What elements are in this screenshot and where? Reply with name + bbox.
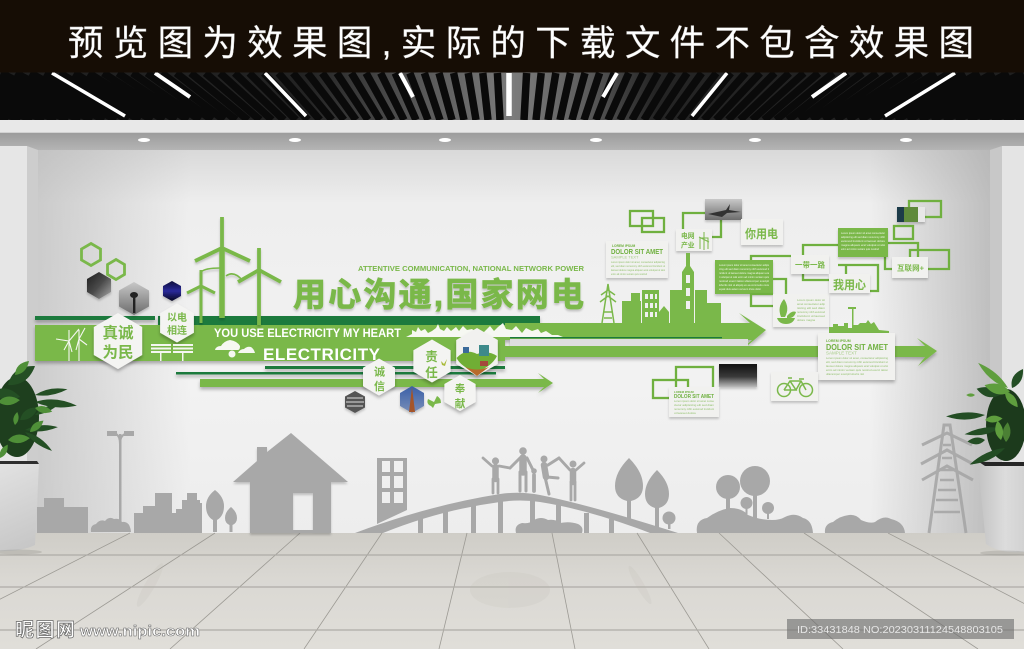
grey silhouette: round trees and hedge xyxy=(697,466,813,533)
card: 我用心 xyxy=(829,274,870,293)
card: dolor sit amet large: SAMPLE TEXT xyxy=(826,350,857,356)
green text card 2: adipisicing elit sed diam nonummy nibh xyxy=(841,235,885,239)
white hexagon: 奉献: 献 xyxy=(455,397,466,410)
grey silhouette: arched bridge xyxy=(355,493,678,533)
white hexagon: 责任: 责 xyxy=(425,349,438,364)
card: dolor sit amet left: Lorem ipsum dolor sit amet, consectetur adipisicing xyxy=(611,260,665,264)
grey silhouette: bush under bridge xyxy=(516,518,582,533)
white hexagon: 真诚为民: 真诚 xyxy=(102,323,134,342)
image id tag xyxy=(787,619,1014,639)
card: 一带一路: 一带一路 xyxy=(795,260,826,270)
green band, lower arrow and dark stripes xyxy=(35,313,937,393)
green city skyline xyxy=(600,253,721,323)
card: 电网产业: 产业 xyxy=(681,240,695,250)
planter feet shadows xyxy=(0,550,1024,556)
photo: airplane xyxy=(705,199,742,220)
icon: small white turbines xyxy=(56,328,87,361)
downlights xyxy=(138,138,912,142)
image id tag: ID:33431848 NO:20230311124548803105 xyxy=(797,625,1003,636)
card: dolor sit amet large: DOLOR SIT AMET xyxy=(826,343,888,352)
green text card 2 xyxy=(838,228,888,257)
leaf card: nonummy nibh euismod xyxy=(797,310,825,314)
floor xyxy=(0,533,1024,649)
card: dolor sit amet small: ut laoreet dolore xyxy=(674,411,696,415)
big word on band: ELECTRICITY xyxy=(263,345,381,364)
connector lines upper xyxy=(683,213,721,237)
card: dolor sit amet small: LOREM IPSUM xyxy=(674,390,694,394)
green text card 2: magna aliquam erat volutpat ut wisi xyxy=(841,243,885,247)
small outline frames top right xyxy=(894,201,941,239)
frames top left of map xyxy=(630,211,664,232)
green text card 2: Lorem ipsum dolor sit amet consectetur xyxy=(841,231,885,235)
card: 一带一路 xyxy=(791,255,829,274)
white hexagon: 真诚为民: 为民 xyxy=(102,344,134,362)
green text card 2: euismod tincidunt ut laoreet dolore xyxy=(841,239,885,243)
small green city above large card xyxy=(829,307,889,333)
card: dolor sit amet left: SAMPLE TEXT xyxy=(611,254,639,260)
card: dolor sit amet large: enim ad minim veniam quis nostrud exerci tation xyxy=(826,368,888,372)
ceiling beam and soffit xyxy=(0,120,1024,150)
ceiling slats xyxy=(0,72,1024,121)
card: dolor sit amet large: ullamcorper suscipit lobortis nisl xyxy=(826,372,864,376)
card: 你用电: 你用电 xyxy=(745,226,778,241)
watermark logo left: 昵图网 xyxy=(15,619,75,641)
green text card 1: cing elit sed diam nonummy nibh euismod ti xyxy=(719,267,769,271)
left plant foliage xyxy=(0,358,77,459)
banner notice text: 预览图为效果图,实际的下载文件不包含效果图 xyxy=(68,23,974,63)
icon: solar panels xyxy=(151,344,193,361)
white hexagon: 真诚为民 xyxy=(94,313,142,369)
icon: pylon xyxy=(600,284,616,323)
frames lower card xyxy=(653,367,713,398)
card: dolor sit amet large: laoreet dolore magna aliquam erat volutpat ut wisi xyxy=(826,364,888,368)
photo hexagon: night scene xyxy=(163,281,181,301)
left planter xyxy=(0,461,39,551)
grey silhouette: two trees xyxy=(206,490,237,532)
leaf card: amet consectetur adip xyxy=(797,302,825,306)
green text card 1 xyxy=(715,260,773,294)
card: dolor sit amet left: laoreet dolore magna aliquam erat volutpat ut wisi xyxy=(611,268,665,272)
white hexagon: 以电相连: 以电 xyxy=(167,311,187,324)
photo hexagon: blue pylon xyxy=(400,386,424,413)
hexagon outlines xyxy=(82,244,124,280)
leaf card: Lorem ipsum dolor sit xyxy=(797,298,825,302)
ceiling light strips xyxy=(52,73,955,116)
white hexagon: 诚信: 诚 xyxy=(374,364,385,378)
card: dolor sit amet large: Lorem ipsum dolor sit amet, consectetur adipisicing xyxy=(826,356,888,360)
grey silhouette: left buildings xyxy=(37,498,88,533)
title: 用心沟通,国家网电 xyxy=(293,276,584,313)
card: 你用电 xyxy=(741,219,783,245)
card: 互联网+: 互联网+ xyxy=(897,262,925,272)
white hexagon: 诚信 xyxy=(363,358,395,396)
icon: clouds and sun xyxy=(215,340,255,358)
grey silhouette: power pylon xyxy=(921,425,973,533)
card: dolor sit amet left: DOLOR SIT AMET xyxy=(611,249,664,256)
photo: green field xyxy=(897,207,925,222)
card: dolor sit amet left xyxy=(606,241,668,278)
grey silhouette: city block xyxy=(134,493,202,533)
top dark banner xyxy=(0,0,1024,72)
wall background xyxy=(0,145,1024,540)
grey silhouette: right hedge xyxy=(825,515,905,533)
card: dolor sit amet large xyxy=(818,333,895,380)
card: dolor sit amet left: LOREM IPSUM xyxy=(612,244,636,248)
white hexagon: 责任 xyxy=(413,340,451,382)
white hexagon: 奉献 xyxy=(444,375,476,411)
green text card 1: nostrud exerci tation ullamcorper suscipit xyxy=(719,279,769,283)
white hexagon: 奉献: 奉 xyxy=(455,382,466,395)
grey silhouette: oval trees on right of bridge xyxy=(615,458,676,529)
grey silhouette: street lamp xyxy=(107,431,134,526)
card: dolor sit amet small xyxy=(669,387,719,417)
watermark url: www.nipic.com xyxy=(79,623,200,640)
card: bicycle xyxy=(771,372,818,401)
leaf card: isicing elit sed diam xyxy=(797,306,826,310)
grey silhouette: apartment block xyxy=(377,458,407,524)
white hexagon: 责任: 任 xyxy=(425,365,438,380)
card: dolor sit amet large: elit, sed diam nonummy nibh euismod tincidunt ut xyxy=(826,360,888,364)
grey silhouette: house xyxy=(233,433,348,533)
lower arrow xyxy=(200,373,553,393)
photo: dark horizon xyxy=(719,364,757,387)
main double arrow xyxy=(500,313,937,366)
side pillars xyxy=(0,146,1024,536)
green text card 1: Lorem ipsum dolor sit amet consectetur adipis xyxy=(719,263,770,267)
connector frames middle xyxy=(751,243,949,306)
card: 电网产业: 电网 xyxy=(681,231,695,240)
right plant foliage xyxy=(946,360,1024,468)
card: dolor sit amet small: Lorem ipsum dolor sit amet conse xyxy=(674,399,714,403)
green text card 1: t volutpat ut wisi enim ad minim veniam quis xyxy=(719,275,770,279)
grey silhouette: bush by lamp xyxy=(91,518,131,532)
icon: green butterfly xyxy=(427,396,441,408)
wind turbines xyxy=(187,217,281,325)
card: dolor sit amet small: DOLOR SIT AMET xyxy=(674,394,715,400)
leaf card: tincidunt ut laoreet xyxy=(797,314,825,318)
subtitle: ATTENTIVE COMMUNICATION, NATIONAL NETWORK POWER xyxy=(358,264,585,273)
green text card 1: ncidunt ut laoreet dolore magna aliquam era xyxy=(719,271,769,275)
card: 我用心: 我用心 xyxy=(833,278,866,292)
white hexagon: 诚信: 信 xyxy=(374,379,385,393)
grey silhouette: family on bridge xyxy=(483,447,584,500)
white skyline on band xyxy=(406,323,563,337)
green text card 1: equat duis autem vel eum iriure dolor xyxy=(719,287,761,291)
card: 电网产业 xyxy=(676,229,712,251)
leaf card xyxy=(773,294,829,327)
card: dolor sit amet small: ctetur adipisicing elit sed diam xyxy=(674,403,714,407)
picture hexagon: green town xyxy=(456,328,498,376)
card: 互联网+ xyxy=(892,257,928,278)
card: dolor sit amet small: nonummy nibh euismod tincidunt xyxy=(674,407,714,411)
right planter xyxy=(978,462,1024,552)
green text card 2: enim ad minim veniam quis nostrud xyxy=(841,247,879,251)
photo badge: round structure xyxy=(345,391,365,413)
card: dolor sit amet large: LOREM IPSUM xyxy=(826,339,851,343)
white hexagon: 以电相连 xyxy=(160,304,194,342)
photo hexagon: tower xyxy=(119,282,149,315)
white hexagon: 以电相连: 相连 xyxy=(167,324,187,337)
card: dolor sit amet left: enim ad minim veniam quis nostrud xyxy=(611,272,647,276)
green text card 1: lobortis nisl ut aliquip ex ea commodo cons xyxy=(719,283,770,287)
slogan on band: YOU USE ELECTRICITY MY HEART xyxy=(214,326,402,340)
leaf card: dolore magna xyxy=(797,318,815,322)
photo hexagon: road xyxy=(87,272,111,299)
card: dolor sit amet left: elit, sed diam nonummy nibh euismod tincidunt ut xyxy=(611,264,665,268)
